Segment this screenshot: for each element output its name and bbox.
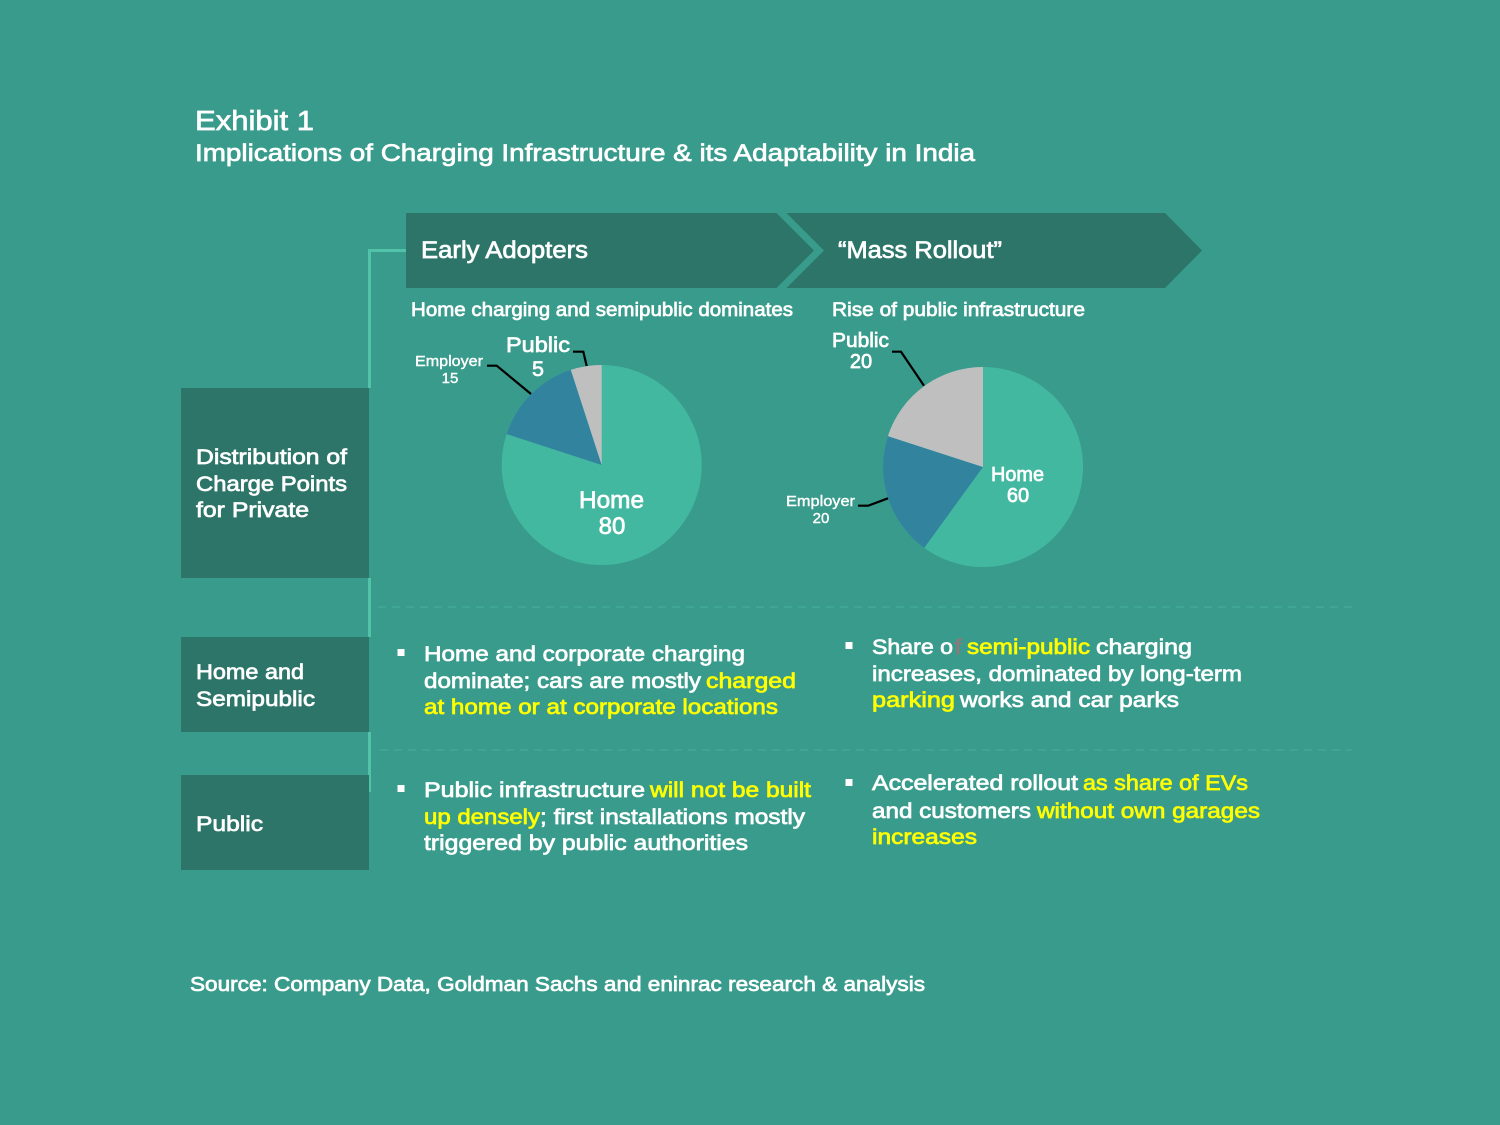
pie chart: early adopters: 15: [442, 370, 458, 387]
pie chart: early adopters: Public: [506, 333, 570, 357]
bullet text: mass rollout, home and semipublic: charging: [1096, 636, 1192, 659]
chevron: Mass Rollout: “Mass Rollout”: [838, 237, 1002, 264]
pie chart: mass rollout: 60: [1007, 485, 1029, 507]
pie chart: mass rollout: Home: [991, 464, 1044, 486]
bullet text: mass rollout, home and semipublic: parking: [872, 689, 955, 712]
row label: distribution: [181, 388, 369, 578]
row label: distribution: Charge Points: [196, 473, 347, 496]
bullet text: early adopters, public: [398, 779, 811, 855]
bullet text: early adopters, home and semipublic: Home and corporate charging: [424, 643, 745, 666]
bullet text: early adopters, home and semipublic: dominate; cars are mostly: [424, 670, 702, 693]
row label: home and semipublic: [181, 637, 369, 732]
bullet text: mass rollout, public: increases: [872, 826, 977, 849]
row label: distribution: for Private: [196, 499, 309, 522]
bullet text: mass rollout, home and semipublic: [846, 636, 1242, 712]
subheading: mass rollout: Rise of public infrastructure: [832, 299, 1085, 321]
row label: public: Public: [196, 813, 263, 836]
row label: home and semipublic: Semipublic: [196, 688, 315, 711]
bullet text: mass rollout, public: without own garages: [1036, 800, 1260, 823]
bullet text: early adopters, home and semipublic: [398, 643, 796, 719]
pie chart: early adopters: Home: [579, 487, 644, 514]
bullet text: early adopters, public: triggered by public authorities: [424, 832, 748, 855]
pie chart: early adopters: Employer: [415, 353, 483, 370]
bullet text: mass rollout, home and semipublic: semi-public: [967, 636, 1090, 659]
title: [195, 105, 976, 167]
bullet text: early adopters, public: Public infrastructure: [424, 779, 645, 802]
source note: Source: Company Data, Goldman Sachs and eninrac research & analysis: [190, 974, 925, 996]
title: Exhibit 1: [195, 105, 314, 136]
pie chart: mass rollout: Employer: [786, 493, 855, 510]
connector line: [368, 249, 406, 792]
bullet text: mass rollout, home and semipublic: f: [954, 636, 962, 659]
pie chart: mass rollout: 20: [850, 351, 872, 373]
pie chart: mass rollout: Public: [832, 330, 889, 352]
bullet text: early adopters, public: ; first installations mostly: [540, 806, 806, 829]
pie chart: mass rollout: 20: [813, 510, 829, 527]
bullet text: early adopters, home and semipublic: charged: [706, 670, 796, 693]
pie chart: early adopters: [415, 333, 702, 565]
bullet text: early adopters, public: up densely: [424, 806, 541, 829]
row label: home and semipublic: Home and: [196, 661, 304, 684]
chevron: Mass Rollout: [786, 213, 1202, 288]
bullet text: mass rollout, public: [846, 772, 1260, 849]
pie chart: early adopters: 80: [599, 513, 625, 540]
bullet text: early adopters, home and semipublic: at home or at corporate locations: [424, 696, 778, 719]
chevron: Early Adopters: [406, 213, 814, 288]
chevron: Early Adopters: Early Adopters: [421, 237, 588, 264]
bullet text: mass rollout, public: and customers: [872, 800, 1031, 823]
row label: distribution: Distribution of: [196, 446, 347, 469]
subheading: early adopters: Home charging and semipublic dominates: [411, 299, 793, 321]
title: Implications of Charging Infrastructure & its Adaptability in India: [195, 140, 976, 167]
bullet text: early adopters, public: will not be built: [649, 779, 811, 802]
bullet text: mass rollout, home and semipublic: works and car parks: [959, 689, 1179, 712]
pie chart: early adopters: 5: [532, 357, 544, 381]
bullet text: mass rollout, public: Accelerated rollout: [872, 772, 1078, 795]
bullet text: mass rollout, public: as share of EVs: [1083, 772, 1248, 795]
bullet text: mass rollout, home and semipublic: Share o: [872, 636, 953, 659]
bullet text: mass rollout, home and semipublic: increases, dominated by long-term: [872, 663, 1242, 686]
pie chart: mass rollout: [786, 330, 1083, 567]
row label: public: [181, 775, 369, 870]
